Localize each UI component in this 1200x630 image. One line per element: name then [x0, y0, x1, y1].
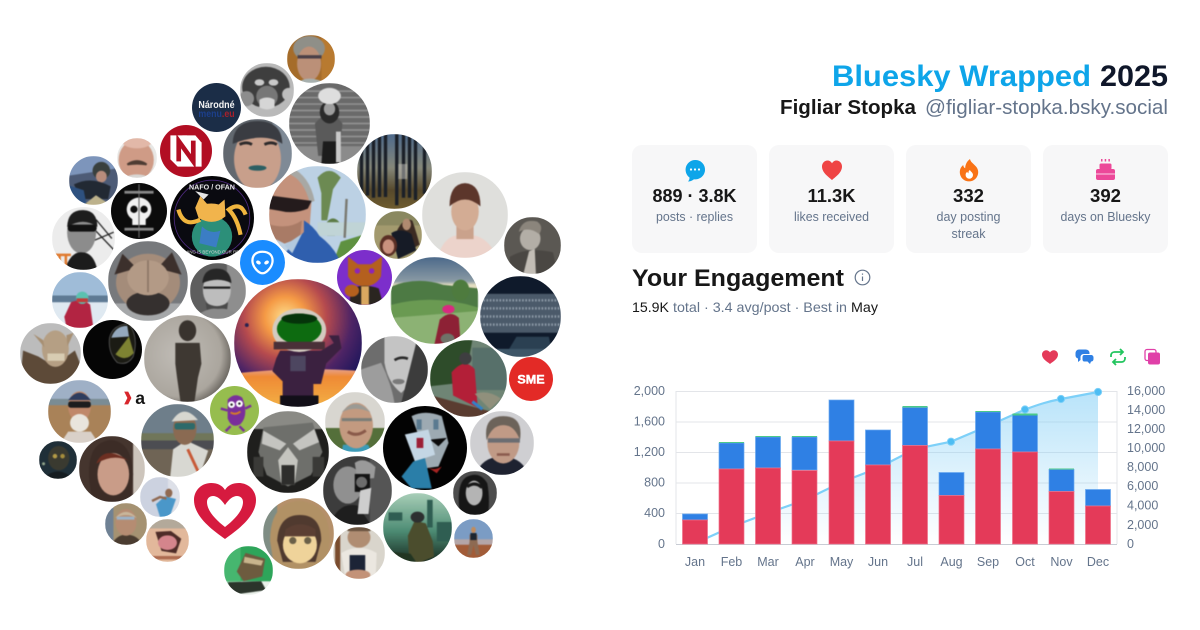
avatar: orc figure — [20, 323, 81, 384]
avatar: woman brick wall — [289, 83, 370, 164]
left axis labels: 1,600 — [634, 414, 665, 428]
right axis labels: 0 — [1127, 537, 1134, 551]
right axis labels: 6,000 — [1127, 479, 1158, 493]
month labels: May — [830, 555, 854, 569]
value: 332 — [953, 185, 984, 206]
value: 392 — [1090, 185, 1121, 206]
left axis labels: 2,000 — [634, 384, 665, 398]
avatar: NAFO emblem: NAFO / OFAN — [189, 183, 235, 191]
legend icon: quotes squares — [1145, 350, 1160, 364]
user name and handle — [780, 97, 1168, 119]
legend icon: repost arrows — [1111, 349, 1125, 365]
avatar: old man in sunlight — [105, 503, 147, 545]
label: posts · replies — [656, 209, 733, 224]
avatar: blue alien — [240, 240, 284, 284]
avatar: Narodne menu logo: menu.eu — [198, 108, 234, 119]
legend icon: likes heart — [1042, 350, 1058, 364]
avatar: NAFO emblem: NOTHING IS BEYOND OUR REACH — [176, 249, 248, 254]
avatar: forest — [357, 134, 432, 209]
avatar: funny man with glasses — [325, 392, 385, 452]
month labels: Apr — [795, 555, 815, 569]
month labels: Jul — [907, 555, 923, 569]
month labels: Oct — [1015, 555, 1035, 569]
avatar: SME logo — [509, 357, 553, 401]
cumulative area — [695, 392, 1098, 544]
month labels: Sep — [977, 555, 999, 569]
icon: chat bubble — [686, 160, 705, 182]
title: 2025 — [1100, 60, 1168, 93]
avatar: silhouette shadow on wall — [144, 315, 231, 402]
avatar: pink figure collage — [146, 519, 189, 562]
panel: day posting streak — [906, 145, 1031, 253]
legend — [1042, 349, 1160, 365]
avatar: typewriter on green — [224, 546, 272, 594]
avatar: arrow a logo: a — [135, 388, 145, 408]
avatar: old man with moustache — [117, 138, 157, 178]
label — [936, 209, 1000, 241]
avatar: grey monkey face — [240, 63, 294, 117]
label: day posting — [936, 209, 1000, 224]
icon: info — [855, 270, 870, 285]
user name and handle: Figliar Stopka — [780, 97, 917, 119]
avatar: man with glasses, wood background — [287, 35, 335, 83]
avatar cloud — [20, 35, 561, 595]
avatar: selfie with phone — [333, 527, 385, 579]
bar chart: monthly engagement — [634, 384, 1165, 569]
summary line: 15.9K — [632, 299, 670, 315]
avatar: green dystopian soldier — [383, 493, 452, 562]
avatar: woman bw close-up — [361, 336, 428, 403]
month labels: Mar — [757, 555, 779, 569]
avatar: woman in hood — [79, 436, 145, 502]
title: Bluesky Wrapped — [832, 60, 1091, 93]
legend icon: replies bubbles — [1076, 350, 1094, 364]
panel: posts and replies — [632, 145, 757, 253]
avatar: cartoon cat — [336, 250, 392, 304]
avatar: older man with glasses — [470, 411, 534, 475]
right axis labels: 10,000 — [1127, 441, 1165, 455]
avatar: woman on green hill — [390, 257, 479, 344]
avatar: pilot in cockpit — [69, 156, 118, 205]
avatar: woman on light background — [422, 172, 508, 258]
avatar: photographer bw — [323, 456, 392, 525]
avatar: astronaut in nebula — [234, 279, 362, 407]
month labels: Aug — [940, 555, 963, 569]
summary line — [632, 299, 878, 315]
avatar: night crowd — [480, 276, 561, 357]
left axis labels: 400 — [644, 506, 665, 520]
month labels: Dec — [1087, 555, 1109, 569]
icon: birthday cake — [1096, 159, 1115, 180]
avatar: skier — [52, 272, 108, 328]
label: days on Bluesky — [1060, 209, 1151, 224]
right axis labels — [1127, 384, 1165, 551]
heading: your engagement: Your Engagement — [632, 265, 844, 292]
icon: flame — [960, 159, 978, 181]
avatar: man in blue shirt — [140, 477, 180, 517]
panel: likes received — [769, 145, 894, 253]
avatar: woman with teal lipstick — [223, 119, 292, 188]
avatar: man bw thinking — [504, 217, 561, 274]
month labels: Feb — [721, 555, 742, 569]
value: 11.3K — [808, 185, 856, 206]
summary line: May — [851, 299, 878, 315]
avatar: dark robot — [39, 441, 77, 479]
user name and handle: @figliar-stopka.bsky.social — [925, 97, 1168, 119]
avatar: skull emblem — [111, 183, 167, 239]
avatar: man with glasses grey — [190, 263, 246, 319]
right axis labels: 14,000 — [1127, 403, 1165, 417]
summary line: total · 3.4 avg/post · Best in — [673, 299, 847, 315]
month labels: Jun — [868, 555, 888, 569]
avatar: SME logo: SME — [517, 372, 545, 386]
left axis labels: 0 — [658, 537, 665, 551]
right axis labels: 2,000 — [1127, 518, 1158, 532]
avatar: robot helmet bw — [247, 411, 329, 493]
avatar: woman portrait dark — [453, 471, 497, 515]
avatar: joker with card — [383, 406, 467, 490]
right axis labels: 8,000 — [1127, 460, 1158, 474]
avatar: man with white beard — [48, 380, 111, 443]
avatar: man in red jacket by lake — [430, 340, 507, 417]
avatar: Narodne menu logo: Národné — [198, 99, 235, 110]
label: streak — [952, 226, 986, 241]
avatar: man in sunglasses bw — [52, 207, 115, 270]
avatar: man with sunglasses and palm trees — [269, 166, 366, 263]
cumulative line — [695, 392, 1098, 543]
right axis labels: 4,000 — [1127, 498, 1158, 512]
avatar: dark circle with porthole — [82, 320, 142, 378]
avatar: cyclist with helmet — [141, 404, 214, 477]
right axis labels: 12,000 — [1127, 422, 1165, 436]
left axis labels: 1,200 — [634, 445, 665, 459]
avatar: Narodne menu logo — [192, 82, 240, 132]
month labels: Nov — [1050, 555, 1073, 569]
left axis labels: 800 — [644, 476, 665, 490]
line markers — [947, 388, 1102, 445]
left axis labels — [634, 384, 665, 551]
avatar: red N logo — [160, 125, 212, 177]
month labels: Jan — [685, 555, 705, 569]
panel: days on Bluesky — [1043, 145, 1168, 253]
avatar: man standing in desert — [454, 519, 493, 558]
icon: heart — [822, 160, 842, 180]
avatar: anime girl with bear hood — [263, 498, 334, 569]
right axis labels: 16,000 — [1127, 384, 1165, 398]
avatar: french bulldog — [108, 241, 188, 321]
avatar: purple cartoon on green — [210, 386, 258, 434]
avatar: arrow a logo — [113, 378, 153, 418]
value: 889 · 3.8K — [652, 185, 737, 206]
label: likes received — [794, 209, 869, 224]
month labels — [685, 555, 1109, 569]
avatar: NAFO emblem — [170, 176, 254, 260]
icon: white heart in red outline — [194, 483, 256, 539]
avatar: couple outdoors — [374, 211, 422, 259]
stacked bars — [682, 400, 1110, 544]
